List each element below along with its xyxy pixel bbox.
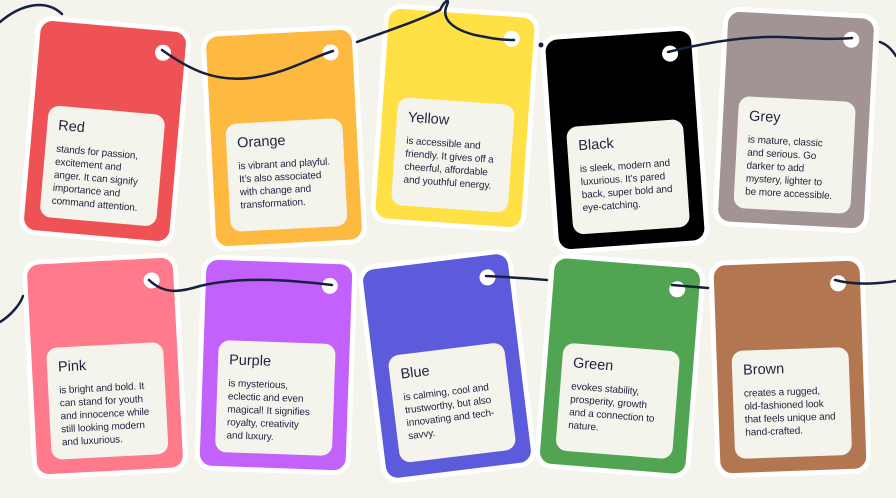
text: red: importance and bbox=[52, 183, 121, 200]
text: green: and a connection to bbox=[569, 407, 655, 425]
text: black: luxurious. It’s pared bbox=[580, 171, 665, 188]
text: brown: old-fashioned look bbox=[744, 399, 824, 413]
card: pink bbox=[27, 257, 183, 475]
text: purple: royalty, creativity bbox=[227, 417, 299, 431]
card: red bbox=[23, 20, 187, 242]
text: orange: with change and bbox=[240, 184, 311, 198]
card: black bbox=[545, 30, 705, 250]
text: orange: is vibrant and playful. bbox=[238, 157, 330, 172]
text: green: Green bbox=[572, 355, 614, 374]
text: grey bbox=[733, 96, 856, 214]
text: purple: magical! It signifies bbox=[227, 404, 310, 418]
text: red: command attention. bbox=[51, 196, 138, 214]
text: blue: trustworthy, but also bbox=[404, 395, 492, 416]
text: red bbox=[39, 105, 166, 227]
text: orange: Orange bbox=[237, 133, 286, 151]
text: brown: that feels unique and bbox=[745, 411, 836, 426]
text: yellow bbox=[391, 97, 515, 213]
text: purple: Purple bbox=[229, 352, 271, 370]
text: pink: Pink bbox=[58, 358, 87, 375]
text: yellow: Yellow bbox=[407, 110, 450, 129]
text: yellow: is accessible and bbox=[406, 136, 481, 152]
text: pink: and innocence while bbox=[60, 407, 150, 422]
text: pink bbox=[46, 342, 169, 460]
text: purple: is mysterious, bbox=[228, 378, 288, 391]
text: purple bbox=[215, 340, 336, 456]
card: purple bbox=[199, 260, 353, 470]
text: orange: It’s also associated bbox=[239, 170, 322, 185]
text: brown: hand-crafted. bbox=[745, 426, 803, 439]
text: yellow: cheerful, affordable bbox=[404, 162, 488, 178]
text: black bbox=[566, 119, 690, 235]
text: green bbox=[555, 343, 680, 459]
text: red: Red bbox=[58, 118, 85, 136]
text: grey: darker to add bbox=[746, 160, 804, 174]
text: grey: Grey bbox=[749, 109, 781, 126]
text: green: nature. bbox=[568, 420, 599, 433]
text: brown: creates a rugged, bbox=[744, 386, 820, 400]
card: orange bbox=[206, 29, 362, 247]
text: yellow: friendly. It gives off a bbox=[405, 149, 494, 166]
card: blue bbox=[362, 253, 532, 479]
text: grey: be more accessible. bbox=[745, 186, 832, 202]
text: purple: and luxury. bbox=[226, 430, 274, 443]
card: green bbox=[539, 258, 701, 474]
text: blue: is calming, cool and bbox=[403, 382, 489, 403]
text: yellow: and youthful energy. bbox=[403, 175, 492, 192]
text: red: excitement and bbox=[55, 157, 122, 174]
text: blue: innovating and tech- bbox=[406, 408, 495, 429]
text: red: anger. It can signify bbox=[53, 170, 138, 188]
text: black: Black bbox=[578, 136, 614, 154]
text: brown: Brown bbox=[743, 361, 784, 379]
text: grey: mystery, lighter to bbox=[746, 173, 822, 188]
text: grey: is mature, classic bbox=[748, 135, 823, 149]
text: pink: is bright and bold. It bbox=[59, 381, 144, 396]
text: orange: transformation. bbox=[240, 197, 306, 211]
text: red: stands for passion, bbox=[56, 144, 138, 162]
text: black: is sleek, modern and bbox=[580, 158, 670, 175]
text: purple: eclectic and even bbox=[228, 391, 304, 405]
text: green: prosperity, growth bbox=[570, 394, 647, 411]
text: black: back, super bold and bbox=[581, 184, 673, 201]
text: green: evokes stability, bbox=[571, 381, 640, 398]
card: brown bbox=[713, 261, 867, 473]
text: blue: savvy. bbox=[408, 428, 436, 442]
card: grey bbox=[718, 11, 874, 229]
text: pink: can stand for youth bbox=[60, 394, 143, 409]
text: grey: and serious. Go bbox=[747, 147, 817, 162]
text: black: eye-catching. bbox=[582, 199, 641, 214]
text: pink: and luxurious. bbox=[62, 434, 123, 448]
text: blue: Blue bbox=[400, 363, 431, 383]
text: blue bbox=[387, 342, 517, 463]
text: orange bbox=[225, 118, 348, 232]
text: brown bbox=[731, 347, 852, 459]
card: yellow bbox=[375, 8, 535, 228]
text: pink: still looking modern bbox=[61, 420, 145, 435]
